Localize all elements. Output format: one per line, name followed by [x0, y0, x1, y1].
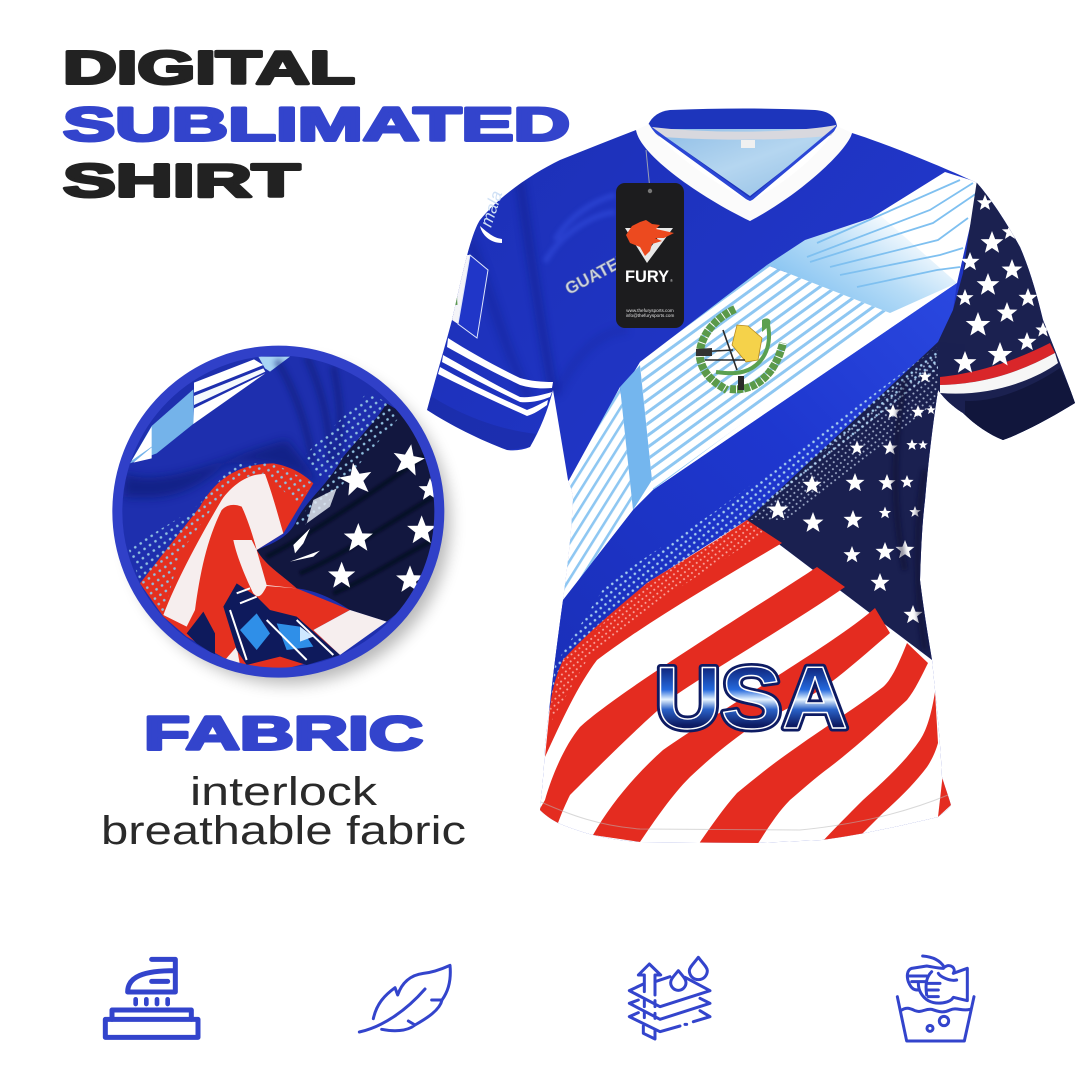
USA lettering: USA	[655, 648, 848, 747]
title: digital sublimated shirt	[63, 42, 570, 206]
blue folds	[123, 440, 320, 498]
fabric description	[101, 770, 466, 853]
hang tag: FURY	[625, 268, 669, 286]
title: digital sublimated shirt: DIGITAL	[63, 42, 355, 94]
hang tag: info@thefurysports.com	[626, 313, 674, 318]
GUATEMALA chest text: GUATEMALA	[562, 231, 666, 299]
red flag stripes	[538, 520, 951, 845]
usa letters in fabric	[187, 612, 215, 655]
hang tag: www.thefurysports.com	[626, 308, 674, 313]
USA lettering: USA	[655, 648, 848, 747]
fabric description: breathable fabric	[101, 809, 466, 853]
hang tag: ®	[670, 278, 673, 283]
shoulder folds	[470, 180, 628, 400]
right navy sleeve	[937, 182, 1075, 440]
title: digital sublimated shirt: SUBLIMATED	[63, 98, 570, 150]
fabric heading: FABRIC	[144, 706, 423, 760]
light blue vertical panel	[620, 365, 652, 510]
fan rays	[807, 180, 977, 287]
icon: moisture wicking layers	[629, 957, 710, 1039]
sleeve script text and swoosh: mala	[477, 188, 506, 229]
navy folds	[267, 450, 433, 593]
white flag field	[540, 520, 951, 843]
blue circle ring	[117, 351, 439, 673]
fabric description: interlock	[190, 770, 378, 814]
fabric detail circle	[113, 347, 450, 684]
circle shadow	[126, 360, 450, 684]
sleeve red and white stripes	[940, 343, 1055, 385]
red halftones	[140, 463, 313, 615]
left sleeve white stripes	[438, 338, 553, 416]
band stripes left	[563, 387, 633, 600]
band stripes centre	[640, 265, 890, 490]
sleeve hem shading	[427, 396, 536, 450]
fabric stars	[290, 442, 441, 592]
halftone band on blue	[550, 347, 938, 707]
stars on sleeve and body	[768, 194, 1051, 623]
red fabric section	[140, 463, 350, 670]
lower blue band	[550, 283, 957, 707]
shirt body	[420, 100, 1090, 860]
navy halftones	[293, 403, 400, 527]
blue halftones	[129, 506, 197, 578]
light blue fan highlight	[767, 215, 957, 313]
title: digital sublimated shirt: SHIRT	[63, 154, 300, 206]
guatemala coat of arms emblem	[696, 309, 783, 390]
shirt photo illustration	[420, 100, 1090, 860]
white fabric folds	[163, 474, 283, 627]
icon: iron	[105, 959, 198, 1037]
circle photo	[113, 347, 447, 680]
navy star field on body	[747, 342, 965, 690]
icon: feather	[359, 965, 450, 1032]
fury logo	[625, 220, 674, 263]
neck lining	[648, 108, 837, 202]
red halftone	[550, 520, 765, 720]
navy stars section	[257, 403, 447, 622]
light blue striped section	[130, 389, 194, 463]
left sleeve flag patch	[452, 255, 488, 338]
hem line	[541, 795, 948, 830]
hang tag	[616, 150, 684, 328]
sleeve hem navy shade	[945, 368, 1078, 445]
icon: hand wash	[897, 956, 974, 1041]
white collar	[636, 124, 852, 221]
striped light band base	[563, 172, 980, 600]
navy folds	[896, 380, 925, 650]
halftone band on navy	[747, 350, 938, 520]
